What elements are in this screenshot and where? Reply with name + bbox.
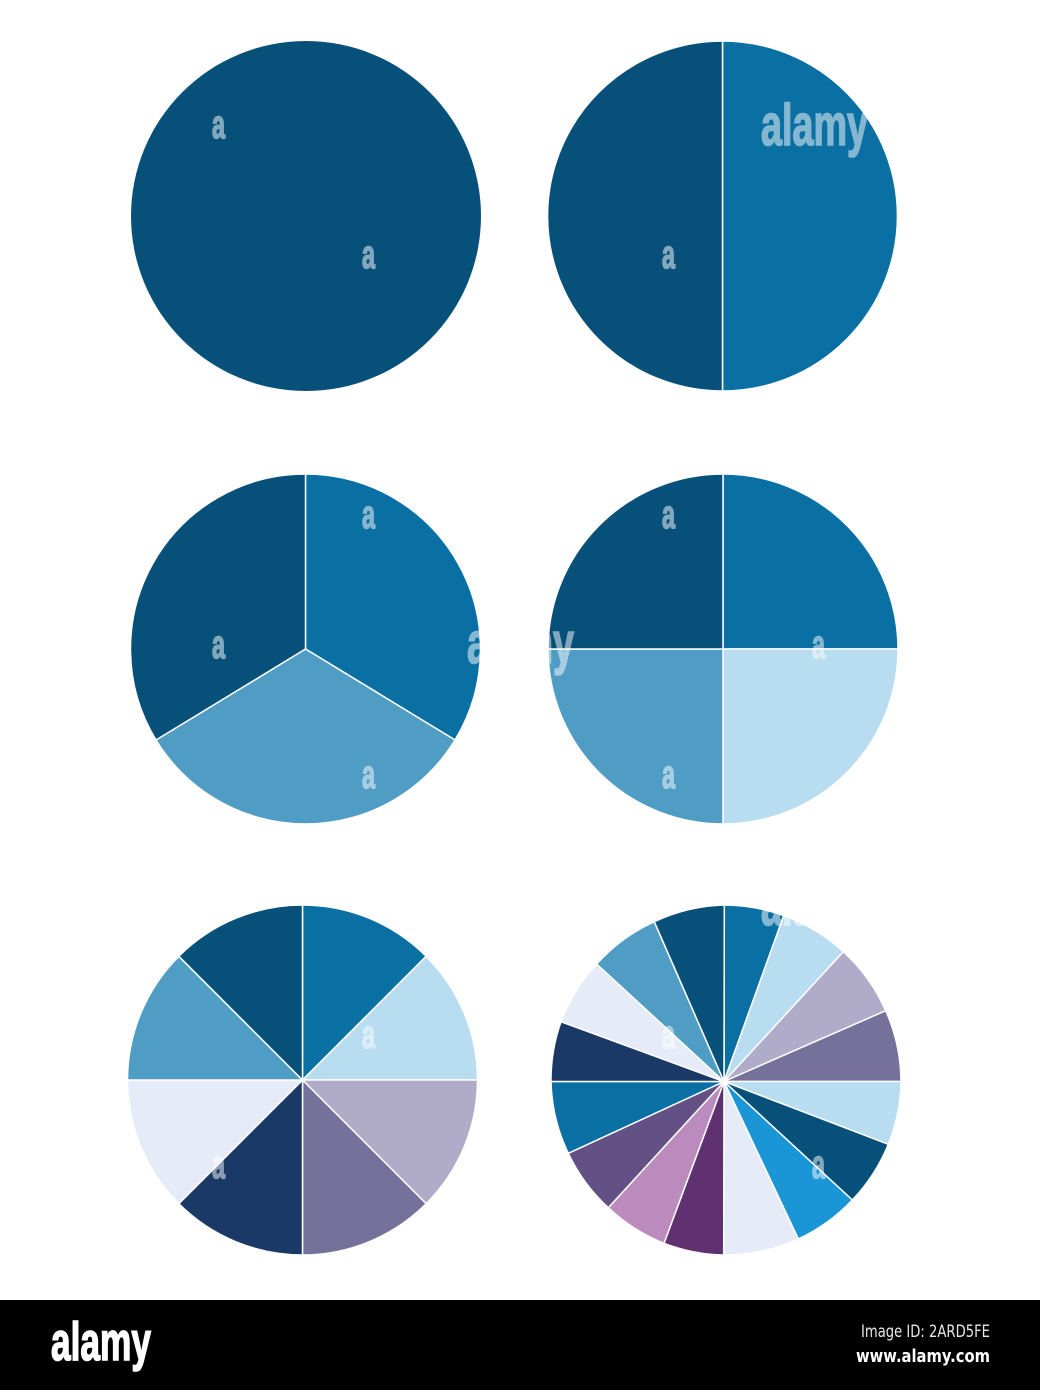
watermark: alamy marks over the pies: a bbox=[212, 623, 225, 667]
watermark: alamy marks over the pies: a bbox=[212, 103, 225, 147]
watermark: alamy marks over the pies: a bbox=[362, 753, 375, 797]
watermark: alamy marks over the pies: alamy bbox=[467, 611, 574, 676]
pie: three slices bbox=[130, 474, 481, 824]
watermark: alamy marks over the pies: a bbox=[362, 493, 375, 537]
pie: four slices bbox=[548, 474, 898, 824]
pie: eight slices bbox=[128, 905, 478, 1255]
watermark: alamy marks over the pies: a bbox=[362, 1013, 375, 1057]
watermark: alamy marks over the pies bbox=[212, 93, 868, 1187]
watermark: alamy marks over the pies: a bbox=[662, 233, 675, 277]
pie: one whole bbox=[131, 41, 481, 391]
watermark: alamy marks over the pies: a bbox=[662, 753, 675, 797]
watermark: alamy marks over the pies: alamy bbox=[761, 93, 868, 158]
watermark: alamy marks over the pies: a bbox=[662, 493, 675, 537]
pie: sixteen slices bbox=[551, 905, 901, 1255]
footer bar bbox=[0, 1300, 1040, 1390]
website: www.alamy.com bbox=[856, 1346, 990, 1367]
watermark: alamy marks over the pies: alamy bbox=[761, 873, 868, 938]
image id: Image ID: 2ARD5FE bbox=[861, 1322, 990, 1342]
footer logo: alamy bbox=[51, 1312, 151, 1372]
pie: two halves bbox=[548, 41, 897, 391]
watermark: alamy marks over the pies: a bbox=[212, 1143, 225, 1187]
watermark: alamy marks over the pies: a bbox=[362, 233, 375, 277]
watermark: alamy marks over the pies: a bbox=[812, 1143, 825, 1187]
watermark: alamy marks over the pies: a bbox=[812, 623, 825, 667]
watermark: alamy marks over the pies: a bbox=[662, 1013, 675, 1057]
